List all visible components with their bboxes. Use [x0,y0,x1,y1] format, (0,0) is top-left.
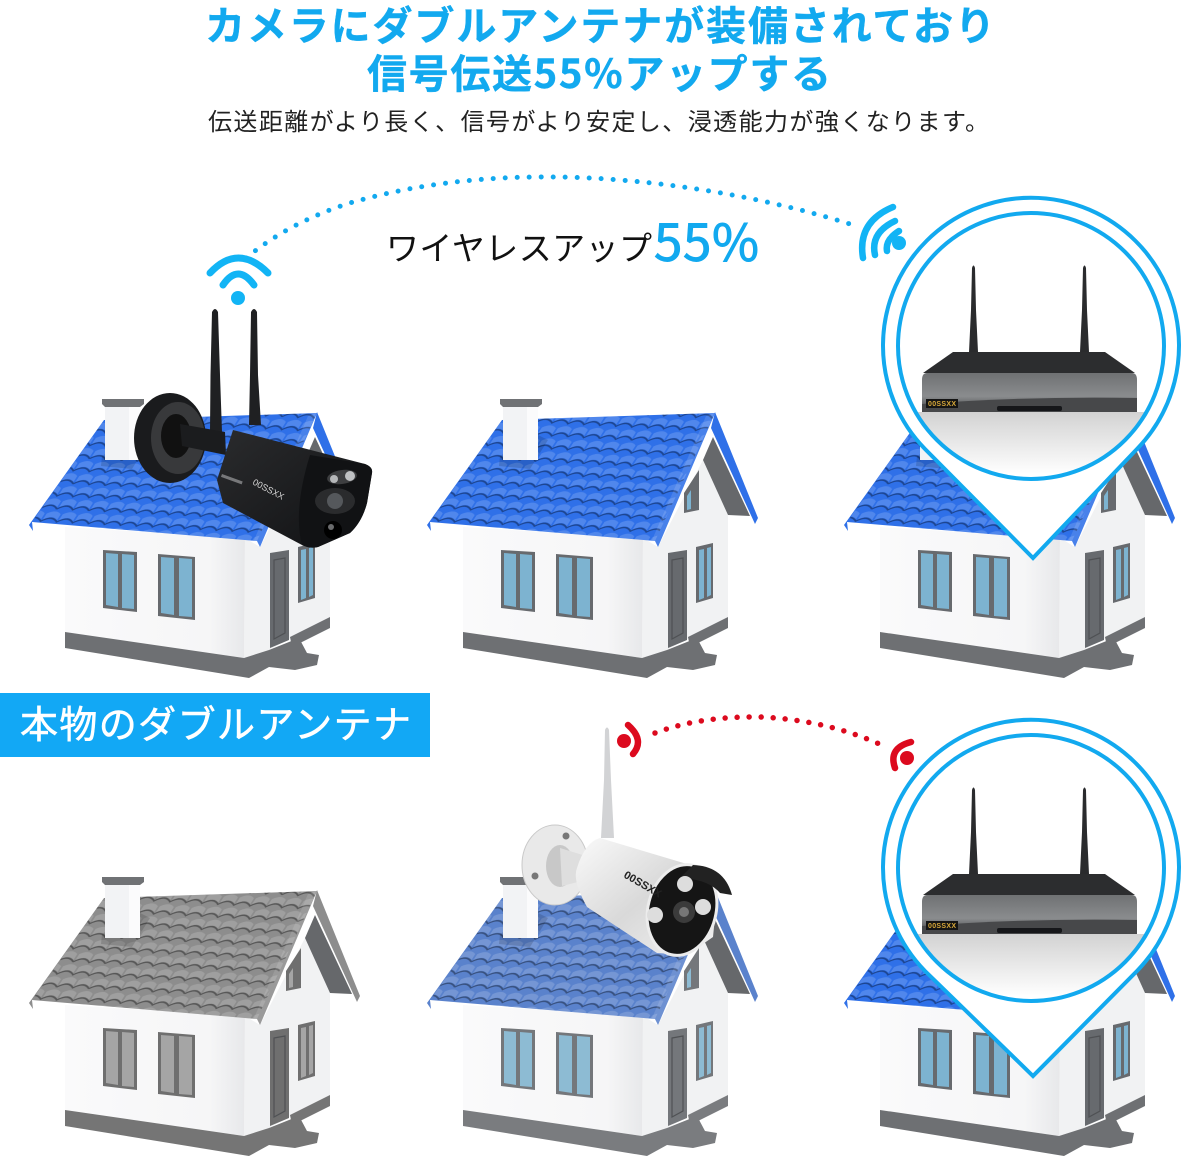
blue dotted signal arc [246,177,850,258]
camera body [217,430,372,548]
black dual antenna camera [134,309,372,548]
icon: wifi at recorder [862,207,906,258]
brand: 00SSXX [251,477,286,502]
video recorder [898,266,1164,474]
house 4: grey roof [29,877,360,1156]
title [205,0,995,100]
icon: red signal at recorder [893,742,914,768]
house 5: faded blue roof with camera [427,877,758,1156]
title: 信号伝送55%アップする [367,42,831,100]
recorder brand: 00SSXX [928,923,956,930]
house 1: blue roof with camera [29,399,360,678]
antennas [210,309,222,432]
banner: genuine dual antenna: 本物のダブルアンテナ [20,694,411,749]
antenna [601,728,614,838]
house 6: blue roof behind recorder pin [844,877,1175,1156]
icon: red signal at camera [617,725,638,754]
wireless up label: ワイヤレスアップ [386,222,652,270]
wireless up label: 55% [654,202,759,276]
recorder pin top [883,198,1179,558]
icon: wifi up at camera [210,258,268,305]
wall bracket [522,825,588,905]
recorder pin bottom [883,720,1179,1076]
brand: 00SSXX [622,869,664,901]
video recorder [898,788,1164,996]
wireless up label [386,202,759,276]
camera body [576,838,717,955]
house 3: blue roof behind recorder pin [844,399,1175,678]
camera face [638,857,726,963]
red dotted signal arc [655,717,888,748]
recorder brand: 00SSXX [928,401,956,408]
subtitle: 伝送距離がより長く、信号がより安定し、浸透能力が強くなります。 [208,102,989,137]
wall bracket [134,393,206,483]
lenses [326,468,358,486]
white single antenna camera [522,728,732,963]
house 2: blue roof [427,399,758,678]
